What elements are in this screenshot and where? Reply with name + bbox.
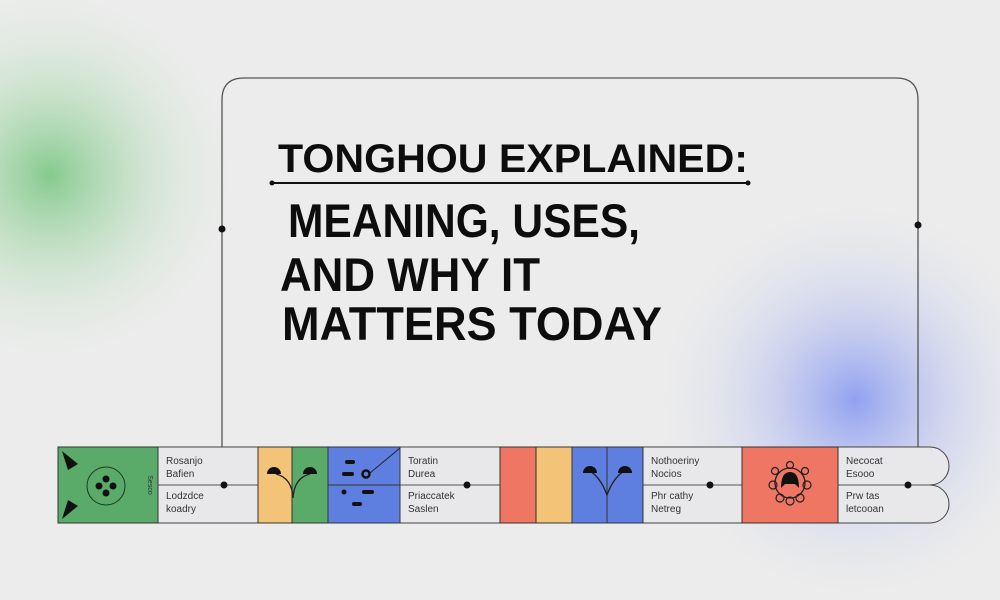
text block 3: Phr cathy (651, 491, 693, 502)
text block 3: Nothoeriny (651, 456, 699, 467)
title (270, 137, 750, 350)
panel: orange green plant (258, 447, 328, 523)
panel: green icon (58, 447, 158, 523)
title: MEANING, USES, (288, 194, 640, 247)
text block 1: Lodzdce (166, 491, 204, 502)
text block 1: Bafien (166, 469, 194, 480)
text block 2: Durea (408, 469, 436, 480)
text block 1: koadry (166, 504, 196, 515)
text block 3: Nocios (651, 469, 682, 480)
title: TONGHOU EXPLAINED: (278, 137, 748, 181)
title frame (218, 78, 922, 447)
title: MATTERS TODAY (282, 297, 662, 350)
text block 3: Netreg (651, 504, 681, 515)
title: AND WHY IT (280, 248, 540, 301)
text block 4 (846, 456, 912, 515)
panel: red face icon (742, 447, 838, 523)
text block 4: Necocat (846, 456, 883, 467)
text block 2 (408, 456, 470, 515)
panel: red orange blue (500, 447, 643, 523)
text block 4: Esooo (846, 469, 875, 480)
text block 3 (651, 456, 714, 515)
panel: green icon: Sesco (146, 475, 153, 495)
text block 1 (166, 456, 228, 515)
text block 2: Saslen (408, 504, 439, 515)
text block 4: Prw tas (846, 491, 879, 502)
panel: blue dashes (328, 447, 400, 523)
text block 2: Priaccatek (408, 491, 456, 502)
timeline strip (58, 447, 949, 523)
text block 1: Rosanjo (166, 456, 203, 467)
text block 4: letcooan (846, 504, 884, 515)
text block 2: Toratin (408, 456, 438, 467)
